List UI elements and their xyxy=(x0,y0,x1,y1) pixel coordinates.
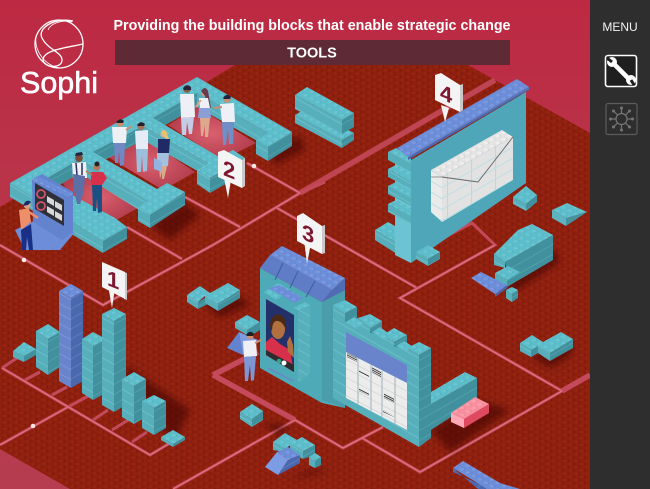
people: room 2 xyxy=(112,119,170,179)
calendar building xyxy=(333,300,431,447)
hub button xyxy=(606,104,637,134)
person at screen xyxy=(19,201,38,250)
flat block left xyxy=(13,342,36,362)
marker 3 xyxy=(297,213,325,264)
pink brick xyxy=(451,397,489,428)
top block of phone xyxy=(264,283,290,300)
people: room 1 xyxy=(72,152,107,213)
calendar sheet xyxy=(346,352,407,430)
title: Providing the building blocks that enable strategic change xyxy=(114,17,510,34)
right wall of blocks xyxy=(431,372,477,430)
marker 1: 1 xyxy=(107,265,120,295)
blue flat brick bottom xyxy=(453,461,520,489)
base brick xyxy=(375,222,411,251)
bar chart of blocks xyxy=(13,284,185,447)
teal bar C xyxy=(102,308,126,412)
teal bar E xyxy=(142,395,166,435)
flat blue brick right xyxy=(471,272,507,297)
sidebar xyxy=(590,0,650,489)
tools banner: TOOLS xyxy=(287,46,337,62)
bottom cluster xyxy=(273,433,315,459)
block: top centre double brick xyxy=(295,87,354,148)
logo: Sophi xyxy=(20,20,98,100)
wall tops xyxy=(10,77,292,241)
marker 1 xyxy=(102,262,127,308)
small cube bottom xyxy=(309,453,321,468)
email wall xyxy=(375,79,529,263)
building: comb walls xyxy=(10,77,292,253)
road network xyxy=(0,80,590,489)
roof studs xyxy=(270,246,345,290)
teal bar D xyxy=(122,372,146,424)
teal bar A xyxy=(36,324,60,375)
blue bar xyxy=(59,284,83,388)
logo: Sophi: Sophi xyxy=(20,65,98,100)
small cube xyxy=(506,287,518,302)
marker 4: 4 xyxy=(440,79,453,109)
side column xyxy=(298,305,310,383)
teal bar B xyxy=(82,332,106,400)
cube centre bottom xyxy=(240,404,263,427)
flat block right xyxy=(161,430,185,447)
blue wedge behind person xyxy=(227,332,258,355)
people: room 3 xyxy=(180,85,235,145)
cube by wall base xyxy=(416,245,440,266)
tools banner xyxy=(115,40,510,65)
marker 2 xyxy=(218,150,245,198)
phone screen xyxy=(266,299,294,372)
block behind person xyxy=(235,315,260,338)
calendar header strip xyxy=(346,332,407,383)
curved roof xyxy=(260,255,332,302)
phone building xyxy=(260,246,345,408)
wall side xyxy=(395,158,411,263)
soft shadows on the floor xyxy=(125,135,575,480)
blue wedge bottom xyxy=(265,447,300,475)
wedge block xyxy=(552,203,587,226)
dashboard screen xyxy=(15,174,75,250)
marker 3: 3 xyxy=(302,219,314,249)
studded red floor xyxy=(0,65,590,489)
room floors xyxy=(62,107,256,222)
envelope of white bricks xyxy=(431,170,442,222)
L block far right xyxy=(520,332,573,361)
marker 4 xyxy=(435,73,463,122)
wall blue top xyxy=(397,79,529,157)
wall face xyxy=(411,92,526,263)
marker 2: 2 xyxy=(223,155,235,185)
person with phone xyxy=(243,332,261,381)
stair blocks xyxy=(494,224,553,287)
loose blocks centre xyxy=(187,283,240,311)
tools button: wrench xyxy=(606,56,636,86)
menu label: MENU xyxy=(602,20,638,34)
blocks right of wall xyxy=(513,186,537,211)
